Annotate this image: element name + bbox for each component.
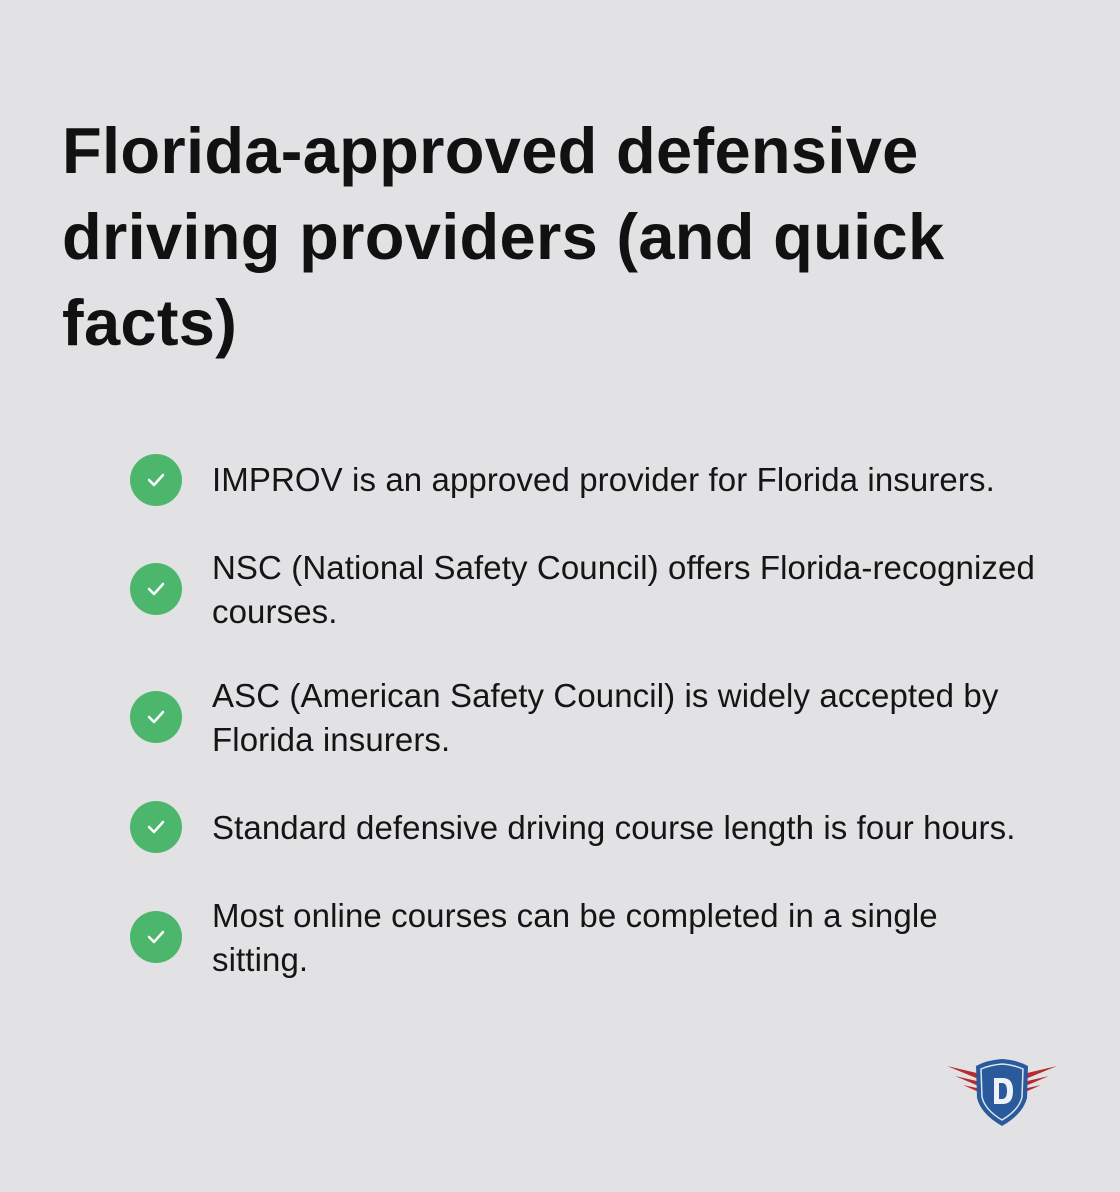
- title: [62, 114, 944, 359]
- item 2: courses.: [212, 593, 338, 630]
- item 5: sitting.: [212, 941, 308, 978]
- item 2: [130, 549, 1035, 630]
- item 2: NSC (National Safety Council) offers Florida-recognized: [212, 549, 1035, 586]
- title: driving providers (and quick: [62, 200, 944, 273]
- icon: check: [130, 454, 182, 506]
- item 1: [130, 454, 995, 506]
- icon: check: [130, 801, 182, 853]
- item 4: [130, 801, 1015, 853]
- title: Florida-approved defensive: [62, 114, 919, 187]
- logo: [947, 1059, 1057, 1126]
- icon: check: [130, 911, 182, 963]
- item 1: IMPROV is an approved provider for Florida insurers.: [212, 461, 995, 498]
- item 4: Standard defensive driving course length is four hours.: [212, 809, 1015, 846]
- icon: check: [130, 691, 182, 743]
- item 5: Most online courses can be completed in a single: [212, 897, 938, 934]
- item 5: [130, 897, 938, 978]
- item 3: ASC (American Safety Council) is widely accepted by: [212, 677, 998, 714]
- title: facts): [62, 286, 237, 359]
- icon: check: [130, 563, 182, 615]
- item 3: Florida insurers.: [212, 721, 450, 758]
- item 3: [130, 677, 998, 758]
